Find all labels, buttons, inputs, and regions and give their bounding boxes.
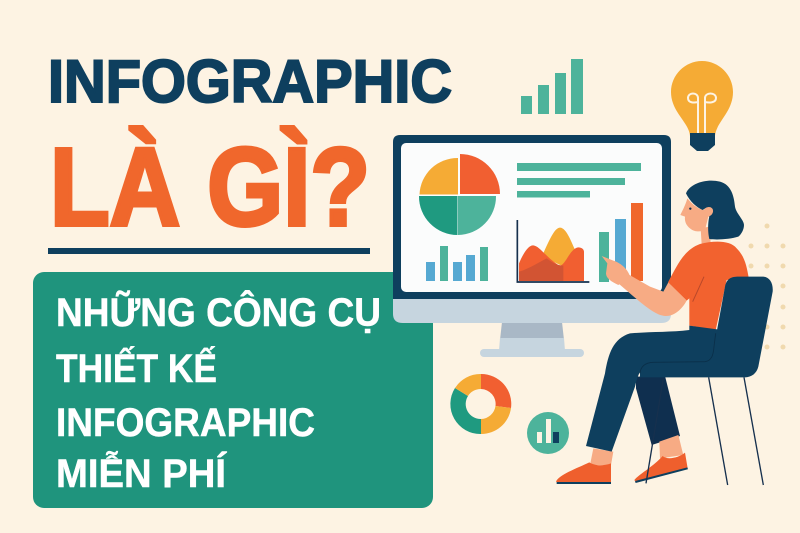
monitor — [393, 135, 671, 357]
person on chair — [556, 181, 773, 485]
right shoe — [634, 453, 688, 483]
shirt — [668, 242, 749, 330]
subtitle line 3: INFOGRAPHIC — [56, 401, 315, 445]
hair — [686, 181, 744, 239]
eye — [689, 207, 691, 210]
text placeholder bars — [517, 163, 641, 198]
hand — [602, 256, 630, 285]
forearm — [618, 273, 687, 316]
chair legs — [646, 377, 763, 485]
chair — [640, 277, 773, 377]
panel: subtitle — [33, 272, 433, 508]
area chart — [517, 220, 589, 282]
subtitle line 4: MIỄN PHÍ — [56, 450, 227, 496]
icon: circular bar chart badge — [527, 412, 569, 454]
shirt fold — [693, 277, 704, 302]
subtitle line 2: THIẾT KẾ — [56, 345, 217, 391]
monitor stand — [480, 322, 584, 357]
neck — [701, 227, 711, 245]
left ankle — [590, 448, 613, 465]
icon: donut chart — [450, 374, 511, 434]
monitor chin — [393, 295, 671, 323]
pie chart — [419, 154, 500, 235]
monitor screen — [401, 143, 662, 292]
title: INFOGRAPHIC: INFOGRAPHIC — [48, 48, 452, 115]
front leg — [586, 326, 727, 452]
left shoe — [556, 462, 611, 483]
icon: light bulb — [671, 61, 733, 151]
face — [680, 198, 713, 231]
shoe soles — [557, 468, 688, 483]
small bar chart — [426, 246, 488, 281]
decorative dots — [748, 223, 785, 349]
icon: rising bar chart — [521, 59, 583, 114]
subtitle line 1: NHỮNG CÔNG CỤ — [56, 289, 381, 335]
large bar chart — [599, 203, 643, 282]
seat crease line — [640, 333, 716, 373]
monitor frame — [393, 135, 671, 299]
right ankle — [659, 435, 683, 458]
title underline — [48, 248, 370, 254]
title: LÀ GÌ?: LÀ GÌ? — [50, 126, 370, 249]
ear — [705, 207, 713, 216]
back leg — [636, 376, 680, 445]
